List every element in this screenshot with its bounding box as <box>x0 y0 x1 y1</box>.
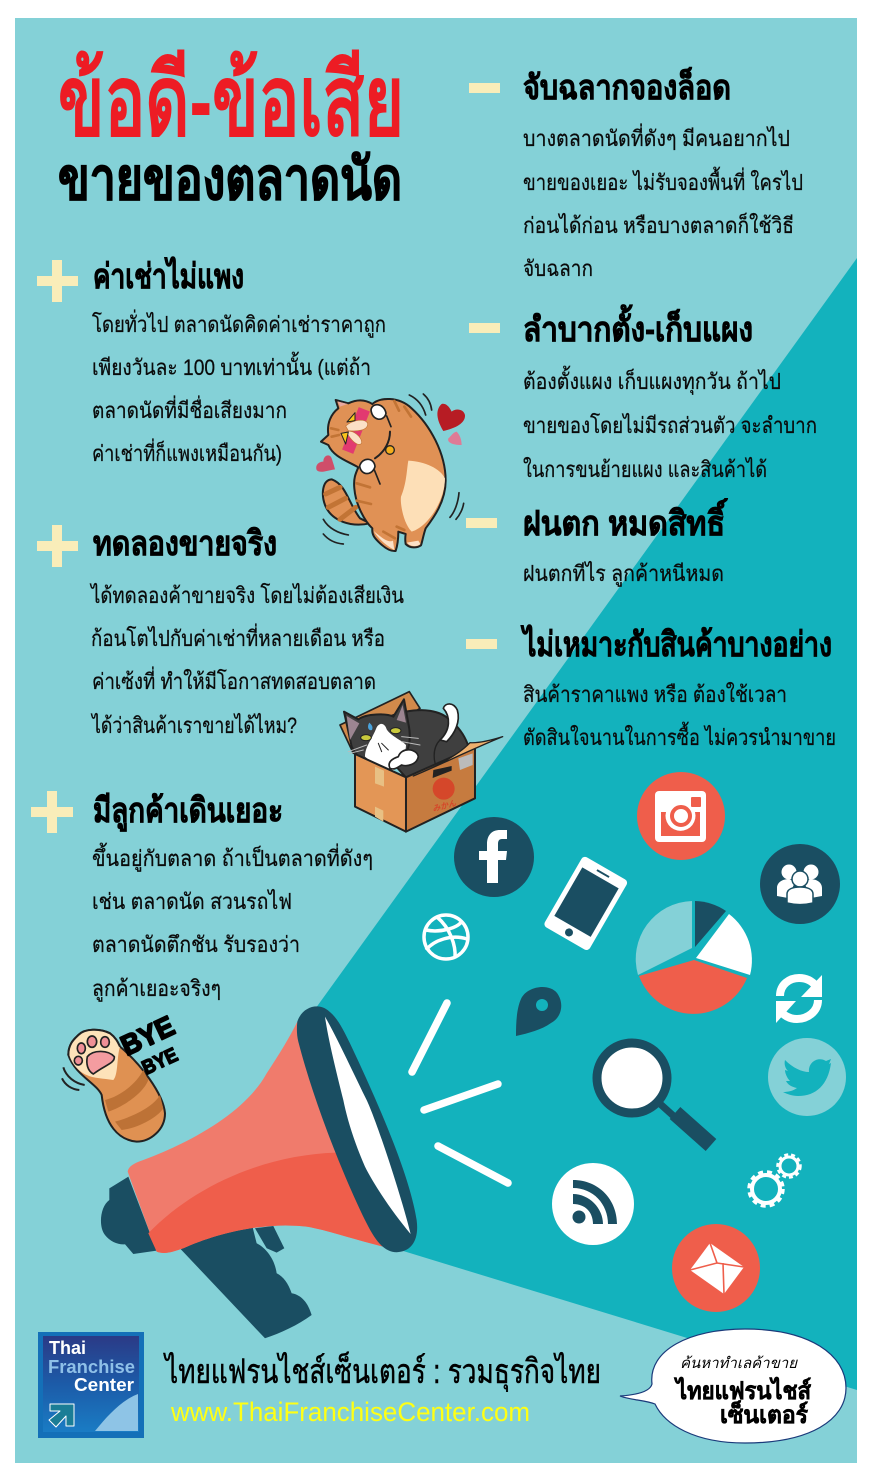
icon: dribbble <box>424 915 468 959</box>
icon: refresh <box>776 975 822 1023</box>
text block <box>523 123 803 281</box>
text block: โดยทั่วไป ตลาดนัดคิดค่าเช่าราคาถูก <box>92 309 386 338</box>
text block <box>92 309 386 466</box>
icon: map pin <box>516 987 561 1036</box>
text block: ต้องตั้งแผง เก็บแผงทุกวัน ถ้าไป <box>523 366 781 395</box>
icon: minus <box>466 518 497 528</box>
heading: ลำบากตั้ง-เก็บแผง <box>523 304 753 349</box>
footer heading: ไทยแฟรนไชส์เซ็นเตอร์ : รวมธุรกิจไทย <box>163 1351 601 1392</box>
illustration: cat in box <box>340 692 503 832</box>
text block <box>89 583 404 738</box>
text block: ตลาดนัดที่มีชื่อเสียงมาก <box>92 395 287 423</box>
icon: plus <box>37 260 78 302</box>
title <box>58 47 404 212</box>
text block: ได้ทดลองค้าขายจริง โดยไม่ต้องเสียเงิน <box>89 583 404 608</box>
mouth <box>325 1017 411 1234</box>
panel: cons 2 <box>469 304 817 482</box>
handle <box>178 1223 312 1338</box>
text block: ตลาดนัดตึกชัน รับรองว่า <box>92 932 300 957</box>
icon: minus <box>469 83 500 93</box>
text block: ขายของโดยไม่มีรถส่วนตัว จะลำบาก <box>523 413 817 438</box>
text block: ค่าเช่าที่ก็แพงเหมือนกัน) <box>92 438 282 466</box>
heading: ค่าเช่าไม่แพง <box>93 256 244 296</box>
text block <box>523 682 836 750</box>
title: ขายของตลาดนัด <box>58 147 402 212</box>
text block <box>92 843 373 1002</box>
horn <box>128 1022 383 1253</box>
icon: instagram <box>637 772 725 860</box>
panel: pros 2 <box>37 525 404 738</box>
logo: Thai Franchise Center: Center <box>74 1375 134 1395</box>
text block: ฝนตกทีไร ลูกค้าหนีหมด <box>523 561 724 587</box>
icon: plus <box>31 791 73 833</box>
heading: มีลูกค้าเดินเยอะ <box>93 792 283 832</box>
text block: ได้ว่าสินค้าเราขายได้ไหม? <box>90 713 297 738</box>
icon: twitter <box>768 1038 846 1116</box>
speech bubble: ไทยแฟรนไชส์ <box>673 1376 811 1405</box>
text block: ขึ้นอยู่กับตลาด ถ้าเป็นตลาดที่ดังๆ <box>92 843 373 872</box>
panel: cons 1 <box>469 66 803 281</box>
icon: group <box>760 844 840 924</box>
heading: ฝนตก หมดสิทธิ์ <box>523 498 729 543</box>
horn shadow <box>148 1153 383 1253</box>
text block <box>523 366 817 482</box>
text block: บางตลาดนัดที่ดังๆ มีคนอยากไป <box>523 123 790 151</box>
illustration: orange cat <box>316 394 465 551</box>
back cap <box>101 1177 157 1254</box>
text block: จับฉลาก <box>523 256 593 281</box>
icon: phone <box>543 855 629 952</box>
text block: เพียงวันละ 100 บาทเท่านั้น (แต่ถ้า <box>92 352 371 380</box>
speech bubble: ค้นหาทำเลค้าขาย <box>680 1355 798 1372</box>
illustration: paw with bye bye: BYE <box>139 1044 181 1080</box>
icon: mail <box>672 1224 760 1312</box>
heading: จับฉลากจองล็อด <box>523 66 731 107</box>
illustration: paw with bye bye <box>62 1010 181 1142</box>
text block: ก่อนได้ก่อน หรือบางตลาดก็ใช้วิธี <box>523 211 794 238</box>
icon: gears <box>749 1154 800 1206</box>
text block: ค่าเซ้งที่ ทำให้มีโอกาสทดสอบตลาด <box>92 666 376 694</box>
heading: ทดลองขายจริง <box>93 525 277 563</box>
footer url: www.ThaiFranchiseCenter.com <box>170 1397 530 1427</box>
diagonal teal area <box>300 258 857 1390</box>
speech bubble: เซ็นเตอร์ <box>720 1400 808 1429</box>
speech bubble <box>620 1329 846 1443</box>
icon: rss <box>552 1163 634 1245</box>
sound rays <box>412 1003 508 1183</box>
logo: Thai Franchise Center <box>38 1332 144 1438</box>
logo: Thai Franchise Center: Thai <box>49 1338 86 1358</box>
panel: cons 4 <box>466 624 836 750</box>
rim <box>297 1006 417 1252</box>
logo: Thai Franchise Center: Franchise <box>48 1357 135 1377</box>
icon: facebook <box>454 817 534 897</box>
illustration: cat in box: みかん <box>432 798 458 814</box>
icon: minus <box>469 323 500 333</box>
illustration: megaphone <box>101 1006 417 1338</box>
pie chart <box>636 901 752 1014</box>
pin hole <box>536 999 548 1011</box>
trigger <box>255 1226 284 1253</box>
panel: cons 3 <box>466 498 729 587</box>
text block: สินค้าราคาแพง หรือ ต้องใช้เวลา <box>523 682 787 707</box>
text block: ขายของเยอะ ไม่รับจองพื้นที่ ใครไป <box>523 167 803 195</box>
panel: pros 1 <box>37 256 386 466</box>
icon: plus <box>37 525 78 567</box>
text block: ในการขนย้ายแผง และสินค้าได้ <box>523 457 767 482</box>
text block: เช่น ตลาดนัด สวนรถไฟ <box>92 889 292 914</box>
text block: ก้อนโตไปกับค่าเช่าที่หลายเดือน หรือ <box>91 623 385 651</box>
title: ข้อดี-ข้อเสีย <box>58 47 404 157</box>
illustration: paw with bye bye: BYE <box>116 1010 179 1061</box>
icon: minus <box>466 639 497 649</box>
icon: magnifier <box>597 1043 711 1145</box>
text block: ลูกค้าเยอะจริงๆ <box>92 976 221 1002</box>
panel: pros 3 <box>31 791 373 1002</box>
